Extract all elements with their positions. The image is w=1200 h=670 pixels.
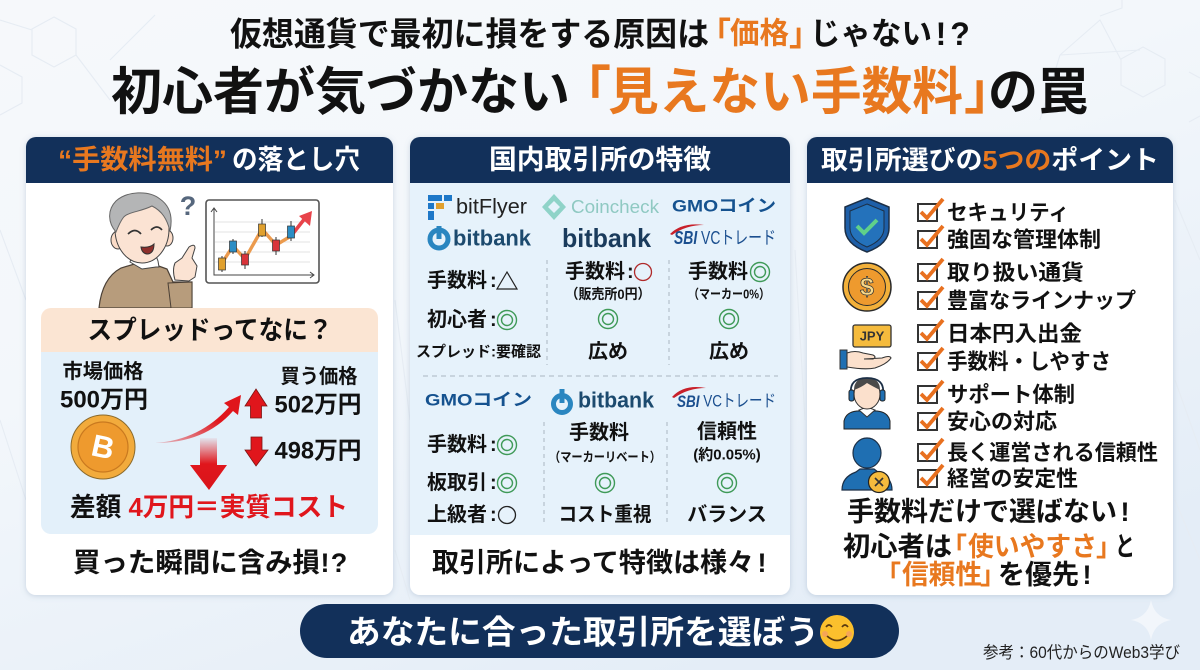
panel 3 conclusion: 初心者は xyxy=(843,532,952,562)
checklist: 豊富なラインナップ xyxy=(947,289,1136,313)
table 1: left column: スプレッド:要確認 xyxy=(416,342,541,360)
logo: bitFlyer: bitFlyer xyxy=(456,196,527,218)
banner: call to action xyxy=(300,604,899,658)
logo: SBI VC Trade lower xyxy=(672,387,776,410)
icon: smiling emoji xyxy=(820,615,854,649)
panel 3 conclusion: 」 xyxy=(1096,532,1122,562)
table 1: left column: : xyxy=(490,309,497,331)
panel 3 heading xyxy=(807,137,1173,183)
panel 3 conclusion: を優先 xyxy=(998,560,1079,590)
title line 2: の罠 xyxy=(988,64,1088,120)
icon: dollar coin: $ xyxy=(860,273,874,301)
panel 3 conclusion: 使いやすさ xyxy=(968,532,1097,562)
chart: candlestick trend xyxy=(206,200,319,283)
table 2: right column: (約0.05%) xyxy=(693,446,761,464)
table 2: middle column xyxy=(549,421,661,526)
panel 2 conclusion: 取引所によって特徴は様々 xyxy=(432,548,754,578)
table 1: left column: : xyxy=(490,270,497,292)
icon: bitcoin coin xyxy=(71,415,135,479)
panel 1 heading xyxy=(26,137,393,183)
title line 1 xyxy=(230,16,970,52)
checklist xyxy=(918,199,1158,491)
arrow: curved up xyxy=(155,395,241,443)
title line 1: じゃない xyxy=(810,16,932,52)
logo: GMO coin: GMOコイン xyxy=(672,196,776,216)
table 1: left column: 初心者 xyxy=(427,308,487,331)
icon: bitcoin coin: B xyxy=(88,428,118,466)
table 2: left column: : xyxy=(490,504,497,526)
spread heading: スプレッドってなに？ xyxy=(88,315,332,345)
table 2: right column xyxy=(687,420,767,526)
checklist: セキュリティ xyxy=(947,201,1069,225)
buy and sell prices: 502万円 xyxy=(274,392,362,418)
panel 3 conclusion: 」 xyxy=(980,560,1006,590)
checklist: サポート体制 xyxy=(947,383,1075,407)
icon: user with badge xyxy=(842,438,892,492)
panel 1 conclusion: 買った瞬間に含み損 xyxy=(73,548,320,578)
logo: bitFlyer xyxy=(428,195,527,220)
buy and sell prices: 買う価格 xyxy=(280,365,358,388)
arrow: small up xyxy=(245,389,267,418)
title line 2 xyxy=(111,63,1088,121)
checklist: 手数料・しやすさ xyxy=(947,350,1111,374)
logo: Coincheck xyxy=(542,194,660,220)
spread explainer box xyxy=(41,308,378,534)
panel: domestic exchanges xyxy=(410,137,790,595)
panel 2 heading xyxy=(410,137,790,183)
title line 1: ? xyxy=(950,16,970,52)
spread cost formula: 差額 4万円＝実質コスト xyxy=(70,492,348,522)
icon: dollar coin xyxy=(843,263,891,311)
logo: Coincheck: Coincheck xyxy=(571,197,660,217)
table 1: middle column: （販売所0円） xyxy=(566,286,650,302)
icon: JPY on hand xyxy=(840,325,891,369)
checklist: 安心の対応 xyxy=(947,410,1057,434)
icon: senior man pointing xyxy=(99,193,197,308)
table 2: left column: : xyxy=(490,434,497,456)
table 1: middle column: : xyxy=(627,261,634,283)
title line 1: 」 xyxy=(789,16,821,52)
panel 2 heading: 国内取引所の特徴 xyxy=(489,145,711,175)
title line 1: 「 xyxy=(699,16,731,52)
banner: call to action: あなたに合った取引所を選ぼう xyxy=(347,614,819,650)
table 2: middle column: （マーカーリベート） xyxy=(549,450,661,464)
table 1: right column: 広め xyxy=(709,340,749,363)
table 2: left column: 手数料 xyxy=(427,433,487,456)
icon: question mark: ? xyxy=(180,191,196,221)
checklist: 長く運営される信頼性 xyxy=(947,441,1158,465)
panel: five points xyxy=(807,137,1173,595)
panel 3 conclusion: 「 xyxy=(875,560,901,590)
panel 3 heading: 取引所選びの5つのポイント xyxy=(821,145,1159,175)
icon: shield xyxy=(845,198,889,252)
checklist: 経営の安定性 xyxy=(947,467,1078,491)
table 2: left column: 板取引 xyxy=(427,471,487,494)
table 2: middle column: 手数料 xyxy=(569,421,629,444)
panel 1 heading: の落とし穴 xyxy=(232,145,360,175)
table 1: left column: 手数料 xyxy=(427,269,487,292)
title xyxy=(111,16,1088,121)
market price: 500万円 xyxy=(60,386,148,414)
title line 1: 仮想通貨で最初に損をする原因は xyxy=(230,16,709,52)
panel 1 conclusion: ! xyxy=(320,548,330,578)
table 2: left column: : xyxy=(490,472,497,494)
arrow: small down xyxy=(245,437,268,466)
table 1: left column xyxy=(416,269,541,360)
logo: SBI VC Trade: SBI VCトレード xyxy=(674,228,776,248)
title line 2: 「 xyxy=(559,63,611,121)
title line 1: ! xyxy=(936,16,946,52)
table 1: right column: 手数料 xyxy=(688,260,748,283)
table 1: right column: （マーカー0%） xyxy=(688,286,770,302)
title line 2: 見えない手数料 xyxy=(608,64,963,120)
checklist: 日本円入出金 xyxy=(947,322,1083,346)
title line 2: 」 xyxy=(964,63,1016,121)
checklist: 強固な管理体制 xyxy=(947,228,1101,252)
logo: bitbank wordmark: bitbank xyxy=(562,223,652,253)
checklist: 取り扱い通貨 xyxy=(947,260,1084,285)
table 2: left column: 上級者 xyxy=(427,503,487,526)
panel 3 conclusion xyxy=(843,497,1135,590)
panel 3 conclusion: ! xyxy=(1082,560,1092,590)
market price xyxy=(60,360,148,414)
logo: SBI VC Trade lower: SBI VCトレード xyxy=(677,392,776,410)
source credit: 参考：60代からのWeb3学び xyxy=(983,643,1180,662)
panel 3 conclusion: ! xyxy=(1120,497,1130,527)
table 1: right column xyxy=(688,260,770,363)
logo: bitbank with icon: bitbank xyxy=(453,226,532,250)
table 1: middle column: 手数料 xyxy=(565,260,625,283)
buy and sell prices: 498万円 xyxy=(274,438,362,464)
icon: JPY on hand: JPY xyxy=(860,328,885,344)
panel 3 conclusion: と xyxy=(1115,532,1135,562)
table 2: right column: 信頼性 xyxy=(697,420,757,443)
buy and sell prices xyxy=(274,365,362,464)
table 2: right column: バランス xyxy=(687,503,767,526)
panel 1 heading: “手数料無料” xyxy=(58,145,227,175)
panel: free-fee pitfall xyxy=(26,137,393,595)
table 2: middle column: コスト重視 xyxy=(558,503,652,526)
title line 2: 初心者が気づかない xyxy=(111,64,570,120)
logo: GMO coin lower: GMOコイン xyxy=(425,390,532,410)
panel 3 conclusion: 信頼性 xyxy=(902,560,982,590)
table 2: left column xyxy=(427,433,516,526)
market price: 市場価格 xyxy=(62,360,144,383)
panel 3 conclusion: 「 xyxy=(941,532,967,562)
panel 2 conclusion: ! xyxy=(758,548,766,578)
table 1: middle column xyxy=(565,260,652,363)
arrow: large down xyxy=(190,438,227,490)
panel 1 conclusion: ? xyxy=(331,548,347,578)
logo: bitbank lower: bitbank xyxy=(578,388,655,412)
table 1: middle column: 広め xyxy=(588,340,628,363)
icon: support operator xyxy=(844,378,890,429)
panel 3 conclusion: 手数料だけで選ばない xyxy=(847,497,1117,527)
title line 1: 価格 xyxy=(730,18,789,50)
logo: SBI VC Trade xyxy=(670,224,776,248)
